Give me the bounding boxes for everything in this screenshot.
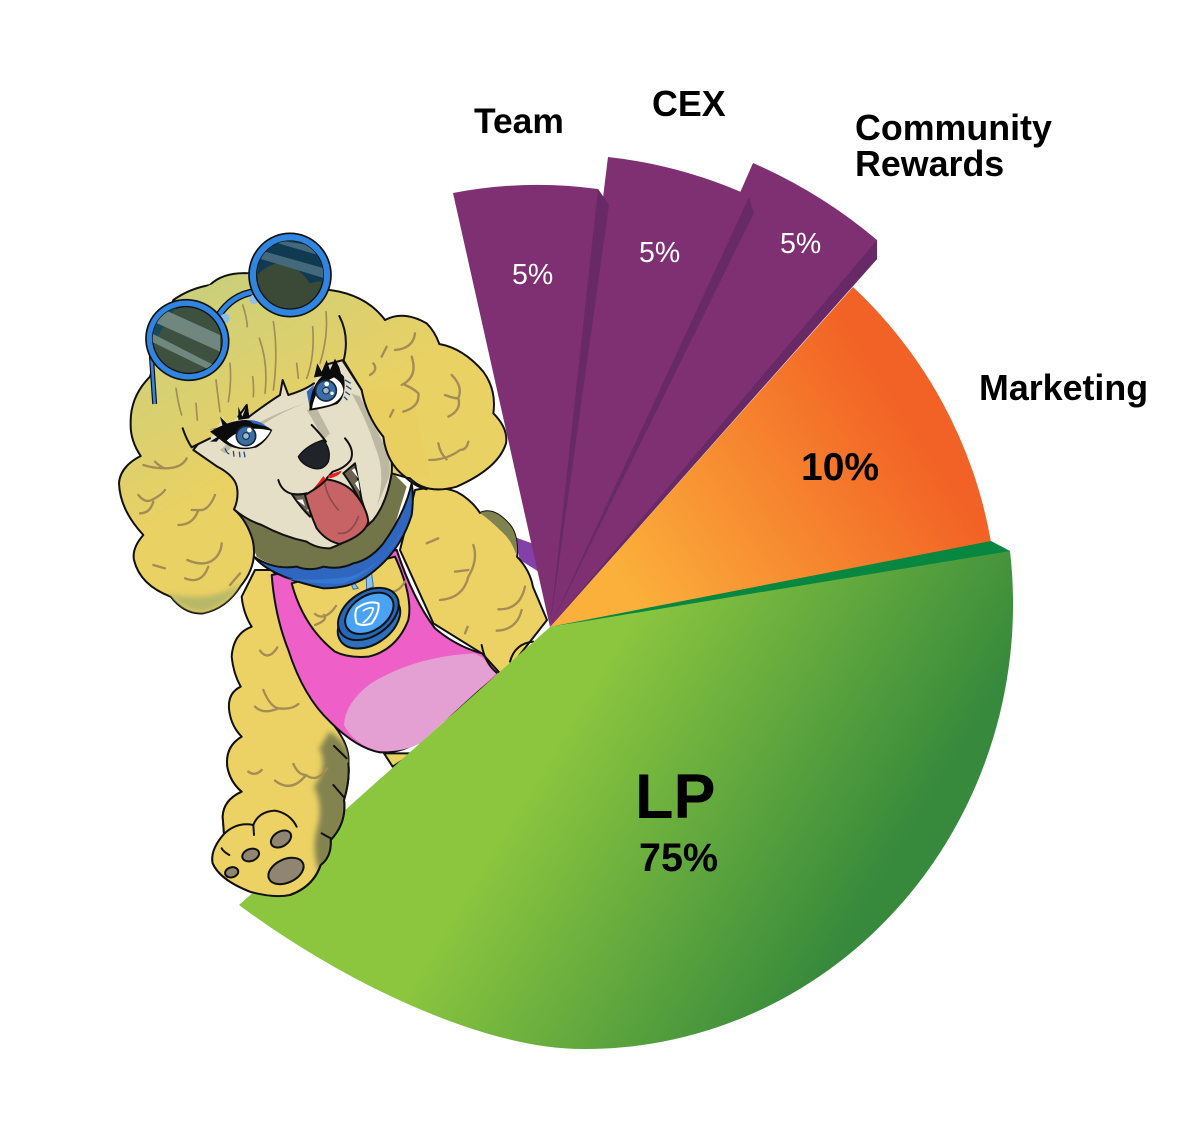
right ear inner outline	[362, 390, 427, 489]
leg clipped to lower part	[211, 740, 350, 898]
slice: team 5%	[453, 185, 609, 627]
value: marketing: 10%	[801, 446, 879, 489]
value: community rewards: 5%	[780, 228, 821, 260]
olive fur tuft on right arm	[480, 511, 517, 557]
neck fur	[237, 470, 407, 569]
sunglasses hinges	[220, 314, 230, 323]
face	[193, 360, 392, 548]
illustration: poodle mascot body	[212, 488, 547, 896]
leg outline edge and spurs	[290, 746, 349, 895]
illustration: poodle mascot head	[119, 233, 506, 613]
slice: community rewards 5%	[550, 163, 877, 627]
bangs fringe outline	[183, 380, 314, 447]
label: community rewards: Community	[855, 108, 1052, 148]
smile line	[278, 480, 307, 495]
leg fur lines	[248, 764, 327, 786]
harness	[272, 550, 500, 752]
medal pendant	[328, 577, 410, 660]
chest fur inside harness	[292, 557, 409, 657]
tongue lines	[325, 483, 358, 533]
value: team: 5%	[512, 259, 553, 291]
collar highlight	[283, 527, 405, 584]
bangs side line	[339, 316, 362, 390]
purple strap behind arm	[513, 537, 547, 577]
body fur lines	[255, 538, 525, 711]
tongue	[305, 479, 368, 544]
bangs	[175, 273, 346, 447]
leg shadow	[314, 732, 352, 873]
medal clip	[345, 568, 373, 589]
label: CEX: CEX	[652, 84, 726, 124]
hair lower shade	[167, 583, 242, 612]
hair silhouette	[119, 273, 506, 613]
teeth	[297, 468, 360, 515]
sunglasses temple	[151, 355, 155, 404]
slice: marketing 10%	[550, 287, 991, 627]
label: team: Team	[474, 101, 564, 141]
hair strands	[176, 305, 327, 420]
left arm upper	[212, 570, 349, 896]
chest fur lines	[315, 582, 405, 625]
left eye	[208, 403, 272, 457]
sunglasses left lens	[145, 298, 230, 382]
right paw behind pie	[482, 642, 533, 673]
harness light belly patch	[344, 653, 497, 751]
label: marketing: Marketing	[979, 368, 1148, 408]
right eye	[307, 359, 351, 411]
ear fur lines	[138, 333, 468, 585]
right ear over face	[362, 387, 430, 477]
face shading	[220, 393, 390, 507]
mouth interior	[292, 463, 365, 517]
label: LP: LP	[635, 762, 716, 832]
label: community rewards: Rewards	[855, 144, 1004, 184]
value: LP: 75%	[639, 836, 718, 880]
sunglasses bridge	[218, 292, 255, 316]
red lips	[313, 471, 363, 504]
slice: CEX 5%	[550, 157, 754, 627]
illustration: mascot front leg and paw over the pie	[211, 730, 350, 898]
nose	[298, 440, 329, 469]
sunglasses right lens	[249, 233, 331, 317]
collar	[254, 483, 413, 588]
right arm	[400, 488, 547, 680]
pie chart	[239, 157, 1013, 1049]
paw pads	[224, 827, 308, 889]
slice: LP 75%	[239, 551, 1013, 1049]
slice edge: dark green	[549, 541, 1010, 627]
muzzle line	[312, 425, 352, 478]
small leg under belly	[384, 753, 413, 767]
value: CEX: 5%	[639, 237, 680, 269]
paw toe lines	[222, 811, 297, 855]
